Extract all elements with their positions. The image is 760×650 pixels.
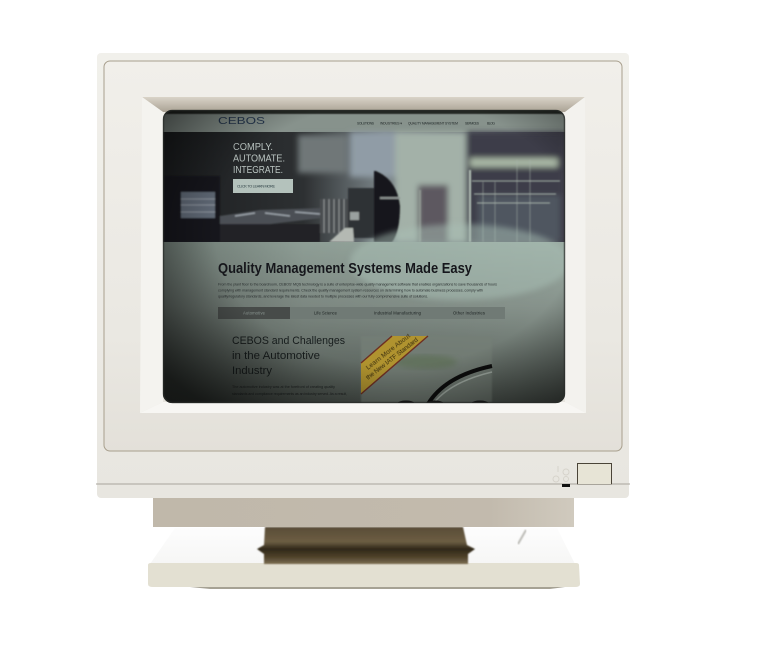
- power button: [577, 463, 612, 485]
- disc ring: [374, 171, 400, 242]
- hero button: [233, 179, 293, 193]
- website industry tabs: Automotive: [243, 310, 266, 316]
- hero button: CLICK TO LEARN MORE: [237, 184, 275, 188]
- website industry tabs: Industrial Manufacturing: [374, 310, 422, 316]
- nav links: SOLUTIONS: [357, 122, 375, 126]
- article heading: [232, 335, 345, 377]
- article body text: standards and compliance requirements as an industry served. As a result,: [232, 392, 347, 396]
- article heading: in the Automotive: [232, 350, 320, 362]
- website intro paragraph: quality/regulatory standards, and leverage the latest data needed to multiple processes with our fully comprehensive suite of solutions.: [218, 295, 428, 299]
- monitor neck: [257, 527, 475, 564]
- infographic: CRT monitor showing CEBOS website: [96, 53, 630, 589]
- gold ribbon banner: Learn More About: [365, 333, 412, 372]
- screen: [163, 108, 570, 406]
- nav links: INDUSTRIES ▾: [380, 122, 402, 126]
- monitor stand collar: [153, 498, 574, 527]
- monitor base: [148, 528, 580, 589]
- nav links: [357, 122, 495, 126]
- article body text: The automotive industry was at the forefront of creating quality: [232, 385, 335, 389]
- front bezel panel: [104, 61, 622, 451]
- website intro paragraph: complying with management standard requirements. Check the quality management system resources on determining how to automate business processes, comply with: [218, 289, 483, 293]
- website nav bar: [163, 108, 565, 132]
- monitor casing: [97, 53, 629, 498]
- hero headline: AUTOMATE.: [233, 152, 285, 164]
- website heading: Quality Management Systems Made Easy: [218, 261, 473, 277]
- nav links: BLOG: [487, 122, 495, 126]
- nav links: SERVICES: [465, 122, 480, 126]
- drill bit: [220, 208, 322, 224]
- website intro paragraph: [218, 283, 497, 299]
- article heading: CEBOS and Challenges: [232, 335, 345, 347]
- article heading: Industry: [232, 365, 272, 377]
- machine highlights: [420, 160, 560, 242]
- article body text: [232, 385, 347, 396]
- gold ribbon banner: [361, 333, 428, 394]
- faint control icons: [553, 466, 569, 482]
- screen recess: [140, 97, 586, 413]
- website industry tabs: Life Science: [314, 310, 338, 316]
- power indicator led: [562, 484, 570, 487]
- bottom casing seam: [96, 483, 630, 485]
- website intro paragraph: From the plant floor to the boardroom, CEBOS' MQS technology is a suite of enterprise-wide quality management software that enables organizations to save thousands of hours: [218, 283, 497, 287]
- gold ribbon banner: the New IATF Standard: [365, 336, 420, 382]
- website hero machine photo: [163, 132, 565, 242]
- CEBOS logo: CEBOS: [218, 115, 265, 127]
- chuck on left: [178, 176, 220, 242]
- website industry tabs: [218, 307, 505, 319]
- cable: [518, 530, 526, 544]
- power controls: [553, 463, 612, 487]
- article photo: [360, 346, 492, 403]
- nav links: QUALITY MANAGEMENT SYSTEM: [408, 122, 458, 126]
- screen vignette: [163, 110, 565, 403]
- hero headline: INTEGRATE.: [233, 164, 283, 176]
- hero headline: [233, 143, 284, 173]
- bracket: [329, 228, 354, 242]
- hero headline: COMPLY.: [233, 141, 273, 153]
- threaded spindle: [320, 199, 350, 233]
- website lower content: [163, 224, 570, 406]
- website industry tabs: Other Industries: [453, 310, 485, 316]
- screen dark rim: [164, 110, 564, 402]
